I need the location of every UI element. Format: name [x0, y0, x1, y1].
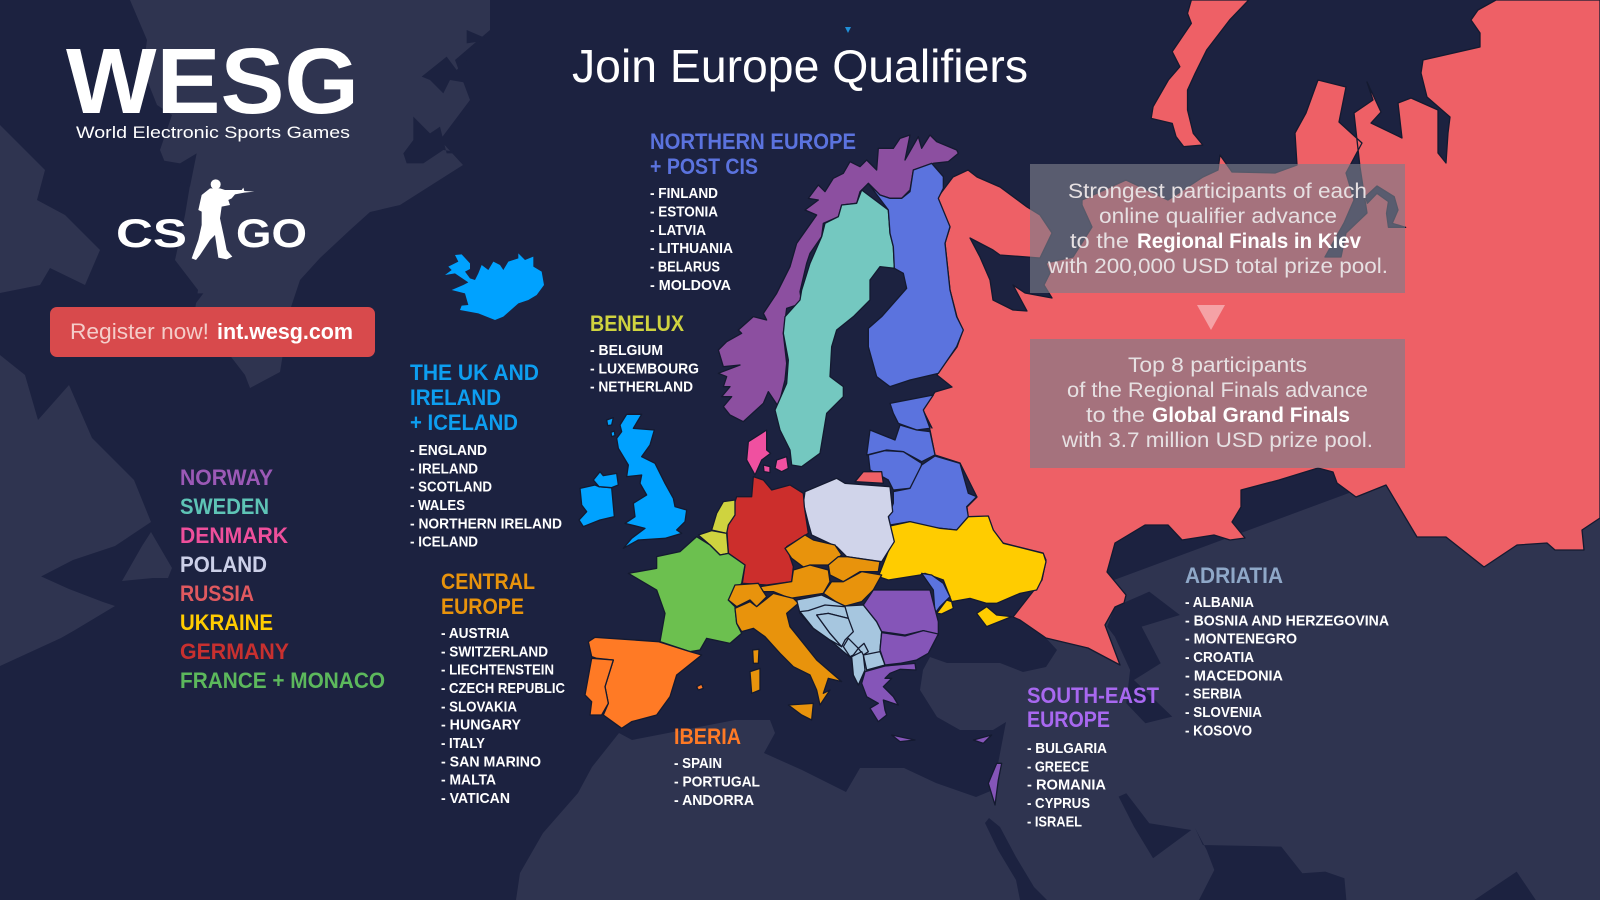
finland [868, 163, 963, 387]
region: central europe: EUROPE [441, 594, 524, 619]
region: the uk and ireland + iceland: - ENGLAND [410, 442, 487, 459]
panel: info box regional finals: Regional Finals in Kiev [1137, 230, 1361, 253]
netherlands and belgium [712, 500, 735, 533]
moldova [922, 573, 950, 613]
eastern mediterranean islands and israel [892, 735, 1002, 805]
region: benelux: - NETHERLAND [590, 379, 693, 396]
map: northern europe [718, 135, 963, 467]
region: adriatia: ADRIATIA [1185, 563, 1283, 588]
panel: info box regional finals: Strongest participants of each [1068, 180, 1367, 203]
logo: WESG: World Electronic Sports Games [76, 123, 350, 142]
panel: info box global finals: Top 8 participants [1128, 354, 1307, 377]
region: south-east europe: - ROMANIA [1027, 777, 1106, 794]
logo: CS:GO: GO [236, 212, 307, 256]
region: central europe: - AUSTRIA [441, 625, 510, 642]
region: adriatia: - SLOVENIA [1185, 704, 1262, 721]
caspian sea [1107, 592, 1180, 723]
region: northern europe + post cis: - MOLDOVA [650, 277, 731, 294]
region: adriatia: - KOSOVO [1185, 722, 1252, 739]
region: the uk and ireland + iceland [410, 360, 562, 551]
germany [727, 477, 808, 585]
region: central europe [441, 569, 565, 807]
map: iceland [445, 253, 544, 320]
logo: CS:GO [116, 179, 307, 260]
region: adriatia: - CROATIA [1185, 649, 1254, 666]
spain [588, 637, 702, 728]
arabian sea [1195, 828, 1346, 900]
panel: info box regional finals: with 200,000 USD total prize pool. [1047, 255, 1388, 278]
region: central europe: - VATICAN [441, 790, 510, 807]
river inlet [1365, 186, 1406, 227]
panel: info box regional finals: online qualifier advance [1099, 205, 1337, 228]
region: iberia: - SPAIN [674, 755, 722, 772]
panel: info box global finals: Global Grand Finals [1152, 404, 1350, 427]
register button: Register now! [70, 319, 209, 344]
france [628, 537, 745, 652]
region: the uk and ireland + iceland: + ICELAND [410, 410, 518, 435]
portugal [585, 658, 613, 715]
panel: info box global finals: of the Regional Finals advance [1067, 379, 1368, 402]
kaliningrad [855, 472, 883, 483]
legend: single-country qualifiers: UKRAINE [180, 610, 273, 635]
region: iberia: - ANDORRA [674, 792, 754, 809]
map: the uk and ireland [579, 414, 687, 548]
region: the uk and ireland + iceland: THE UK AND [410, 360, 539, 385]
region: adriatia: - SERBIA [1185, 686, 1242, 703]
legend: single-country qualifiers: SWEDEN [180, 494, 269, 519]
central europe group [728, 535, 882, 720]
region: the uk and ireland + iceland: - NORTHERN IRELAND [410, 515, 562, 532]
region: northern europe + post cis: - LATVIA [650, 222, 706, 239]
region: iberia [674, 724, 760, 809]
register button [50, 307, 375, 357]
region: northern europe + post cis: NORTHERN EUROPE [650, 129, 856, 154]
region: central europe: - SAN MARINO [441, 753, 541, 770]
region: benelux: BENELUX [590, 311, 684, 336]
panel: info box regional finals [1030, 164, 1405, 293]
estonia [890, 395, 933, 430]
latvia [867, 425, 935, 462]
map: continental europe [585, 425, 1046, 805]
arrow [1197, 305, 1225, 330]
region: benelux: - LUXEMBOURG [590, 360, 699, 377]
region: adriatia: - ALBANIA [1185, 594, 1254, 611]
legend: single-country qualifiers: RUSSIA [180, 581, 254, 606]
logo: WESG: WESG [66, 29, 359, 133]
map: balkans [797, 590, 938, 722]
novaya zemlya [1151, 0, 1249, 147]
south-east europe group [862, 590, 938, 722]
sweden [775, 190, 894, 467]
region: south-east europe: - GREECE [1027, 758, 1089, 775]
region: northern europe + post cis: + POST CIS [650, 154, 758, 179]
region: south-east europe: EUROPE [1027, 707, 1110, 732]
region: the uk and ireland + iceland: - ICELAND [410, 534, 478, 551]
legend: single-country qualifiers [180, 465, 385, 693]
legend: single-country qualifiers: DENMARK [180, 523, 288, 548]
region: south-east europe: SOUTH-EAST [1027, 683, 1160, 708]
region: the uk and ireland + iceland: - IRELAND [410, 460, 478, 477]
region: benelux: - BELGIUM [590, 342, 663, 359]
region: adriatia [1185, 563, 1389, 739]
region: northern europe + post cis: - LITHUANIA [650, 240, 733, 257]
region: benelux [590, 311, 699, 396]
region: central europe: - SLOVAKIA [441, 698, 517, 715]
region: the uk and ireland + iceland: - WALES [410, 497, 465, 514]
region: iberia: IBERIA [674, 724, 741, 749]
logo: CS:GO: CS [116, 212, 187, 256]
region: central europe: - HUNGARY [441, 717, 521, 734]
region: south-east europe [1027, 683, 1160, 830]
legend: single-country qualifiers: NORWAY [180, 465, 273, 490]
region: adriatia: - BOSNIA AND HERZEGOVINA [1185, 612, 1389, 629]
lithuania [868, 451, 922, 490]
legend: single-country qualifiers: FRANCE + MONACO [180, 668, 385, 693]
region: central europe: - SWITZERLAND [441, 643, 548, 660]
adriatia group [797, 595, 885, 685]
panel: info box global finals [1030, 339, 1405, 468]
denmark [747, 430, 771, 475]
map: russia [923, 0, 1600, 665]
region: central europe: - LIECHTENSTEIN [441, 662, 554, 679]
region: the uk and ireland + iceland: - SCOTLAND [410, 479, 492, 496]
region: south-east europe: - CYPRUS [1027, 795, 1090, 812]
region: northern europe + post cis: - BELARUS [650, 258, 720, 276]
ukraine [878, 516, 1046, 603]
title: Join Europe Qualifiers [572, 40, 1028, 92]
region: central europe: - MALTA [441, 772, 496, 789]
poland [803, 478, 894, 562]
register button: int.wesg.com [217, 319, 353, 344]
region: south-east europe: - ISRAEL [1027, 813, 1082, 830]
panel: info box regional finals: to the [1070, 230, 1129, 253]
panel: info box global finals: to the [1086, 404, 1145, 427]
region: the uk and ireland + iceland: IRELAND [410, 385, 501, 410]
greenland fjords [422, 57, 470, 93]
panel: info box global finals: with 3.7 million USD prize pool. [1061, 429, 1373, 452]
region: northern europe + post cis: - ESTONIA [650, 204, 718, 220]
norway [718, 135, 958, 422]
region: adriatia: - MONTENEGRO [1185, 631, 1297, 648]
region: iberia: - PORTUGAL [674, 774, 760, 791]
region: south-east europe: - BULGARIA [1027, 740, 1107, 757]
persian gulf [1119, 793, 1191, 858]
legend: single-country qualifiers: POLAND [180, 552, 267, 577]
region: northern europe + post cis [650, 129, 856, 294]
region: central europe: - ITALY [441, 735, 485, 752]
legend: single-country qualifiers: GERMANY [180, 639, 289, 664]
region: adriatia: - MACEDONIA [1185, 667, 1283, 684]
belarus [888, 456, 977, 530]
region: central europe: CENTRAL [441, 569, 535, 594]
region: central europe: - CZECH REPUBLIC [441, 680, 565, 697]
region: northern europe + post cis: - FINLAND [650, 185, 718, 202]
